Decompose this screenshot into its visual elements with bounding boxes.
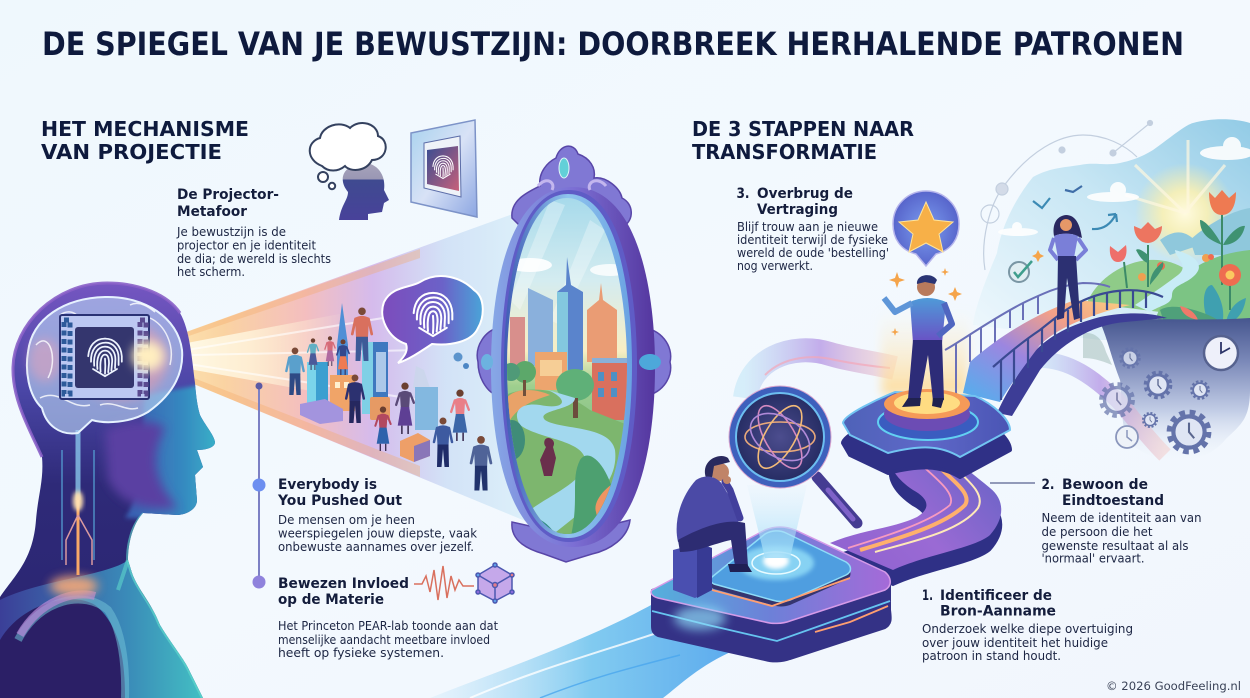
icon: birds and arrow	[1033, 186, 1117, 229]
text: step 2 bewoon de eindtoestand	[1042, 477, 1202, 566]
text: everybody is you pushed out: Everybody is	[278, 477, 377, 493]
front railing	[993, 290, 1163, 400]
icon: sparkles around standing man	[889, 250, 1044, 336]
text: bewezen invloed op de materie: Bewezen Invloed	[278, 576, 409, 592]
icon: film frame with fingerprint	[60, 315, 149, 399]
text: step 1 identificeer de bron-aanname: over jouw identiteit het huidige	[922, 636, 1108, 650]
mirror frame ornaments	[477, 146, 671, 562]
text: step 3 overbrug de vertraging	[736, 186, 889, 273]
text: de projector-metafoor: de dia; de wereld is slechts	[177, 252, 331, 266]
text: everybody is you pushed out: onbewuste aannames over jezelf.	[278, 540, 474, 554]
text: bewezen invloed op de materie: Het Princeton PEAR-lab toonde aan dat	[278, 619, 498, 633]
icon: thought cloud with head	[310, 123, 389, 220]
mirror glass city scene	[507, 198, 627, 534]
illustration: fading clocks and gears	[1035, 318, 1250, 461]
stream flowing into step 1	[430, 600, 735, 698]
text: step 3 overbrug de vertraging: Vertraging	[757, 202, 838, 218]
connector line for step 2	[990, 482, 1035, 484]
text: everybody is you pushed out: You Pushed Out	[277, 493, 402, 509]
text: step 1 identificeer de bron-aanname: patroon in stand houdt.	[922, 649, 1061, 663]
icon: brain	[27, 297, 182, 433]
icon: human head silhouette with brain	[0, 270, 230, 698]
illustration: arched bridge	[945, 283, 1167, 416]
text: step 3 overbrug de vertraging: Overbrug de	[757, 186, 853, 202]
text: step 1 identificeer de bron-aanname: Bron-Aanname	[940, 604, 1056, 620]
text: step 2 bewoon de eindtoestand: Neem de identiteit aan van	[1042, 511, 1202, 525]
text: de projector-metafoor: De Projector-	[177, 187, 279, 203]
heading: het mechanisme van projectie: HET MECHANISME	[41, 117, 249, 141]
back railing	[945, 283, 1110, 395]
text: bewezen invloed op de materie: menselijke aandacht meetbare invloed	[278, 633, 490, 647]
icon: star badge bubble	[893, 191, 959, 266]
icon: standing man	[884, 275, 952, 408]
icon: glass slide with fingerprint	[411, 120, 477, 217]
heading: de 3 stappen naar transformatie: TRANSFORMATIE	[692, 140, 877, 164]
icon: woman on bridge	[1050, 215, 1086, 320]
heading: de 3 stappen naar transformatie: DE 3 STAPPEN NAAR	[692, 117, 914, 141]
decorative constellation lines	[981, 120, 1152, 270]
buildings	[300, 303, 438, 462]
text: step 2 bewoon de eindtoestand: Bewoon de	[1062, 477, 1148, 493]
timeline connector	[252, 382, 266, 588]
text: de projector-metafoor	[176, 187, 331, 279]
text: step 1 identificeer de bron-aanname: 1.	[922, 588, 933, 604]
text: de projector-metafoor: Metafoor	[177, 204, 247, 220]
text: step 3 overbrug de vertraging: 3.	[736, 186, 750, 202]
panel: mechanism of projection	[0, 117, 671, 698]
illustration: people and buildings in the beam	[286, 276, 491, 490]
text: step 3 overbrug de vertraging: Blijf trouw aan je nieuwe	[737, 220, 878, 234]
panel: three steps to transformation	[430, 117, 1250, 698]
heading: het mechanisme van projectie	[41, 117, 249, 164]
projection beam	[150, 206, 535, 525]
text: step 2 bewoon de eindtoestand: Eindtoestand	[1062, 493, 1164, 509]
clouds	[998, 137, 1250, 236]
winding road between step 1 and 2	[830, 450, 1001, 585]
text: step 1 identificeer de bron-aanname: Onderzoek welke diepe overtuiging	[922, 622, 1133, 636]
glow column behind standing man	[880, 310, 970, 395]
icon: sound wave	[414, 566, 474, 600]
heading: de 3 stappen naar transformatie	[692, 117, 914, 164]
text: step 1 identificeer de bron-aanname	[922, 588, 1133, 663]
decorative check mark	[1009, 261, 1032, 282]
text: de projector-metafoor: projector en je identiteit	[177, 238, 316, 252]
text: step 3 overbrug de vertraging: identiteit terwijl de fysieke	[737, 233, 888, 247]
icon: flowers	[1110, 190, 1246, 325]
platform: step 1	[651, 527, 891, 661]
text: step 3 overbrug de vertraging: nog verwerkt.	[737, 259, 813, 273]
text: step 2 bewoon de eindtoestand: gewenste resultaat al als	[1042, 539, 1188, 553]
text: de projector-metafoor: Je bewustzijn is de	[176, 225, 286, 239]
text: step 2 bewoon de eindtoestand: 2.	[1042, 477, 1054, 493]
text: step 3 overbrug de vertraging: wereld de oude 'bestelling'	[737, 246, 889, 260]
text: bewezen invloed op de materie	[278, 576, 498, 660]
illustration: landscape with sun and flowers	[973, 119, 1250, 340]
platform: step 2 base	[843, 389, 1010, 477]
text: everybody is you pushed out	[277, 477, 477, 554]
text: step 2 bewoon de eindtoestand: de persoon die het	[1042, 525, 1153, 539]
text: step 1 identificeer de bron-aanname: Identificeer de	[940, 588, 1052, 604]
icon: ornate mirror with city	[477, 146, 671, 562]
text: de projector-metafoor: het scherm.	[177, 265, 245, 279]
heading: het mechanisme van projectie: VAN PROJECTIE	[41, 140, 222, 164]
text: bewezen invloed op de materie: op de Materie	[278, 592, 384, 608]
flowing ribbon behind platform	[745, 350, 895, 398]
text: step 2 bewoon de eindtoestand: 'normaal' ervaart.	[1042, 552, 1144, 566]
footer: copyright: © 2026 GoodFeeling.nl	[1106, 679, 1241, 693]
people	[286, 308, 491, 490]
text: everybody is you pushed out: De mensen om je heen	[278, 513, 415, 527]
icon: thinking man on box	[673, 456, 752, 598]
text: everybody is you pushed out: weerspiegelen jouw diepste, vaak	[278, 526, 477, 540]
speech bubble with fingerprint	[382, 276, 483, 369]
light beam rising from platform	[747, 485, 807, 558]
text: bewezen invloed op de materie: heeft op fysieke systemen.	[278, 646, 444, 660]
icon: molecular cube	[476, 563, 514, 603]
icon: magnifying glass with atom	[729, 386, 857, 523]
